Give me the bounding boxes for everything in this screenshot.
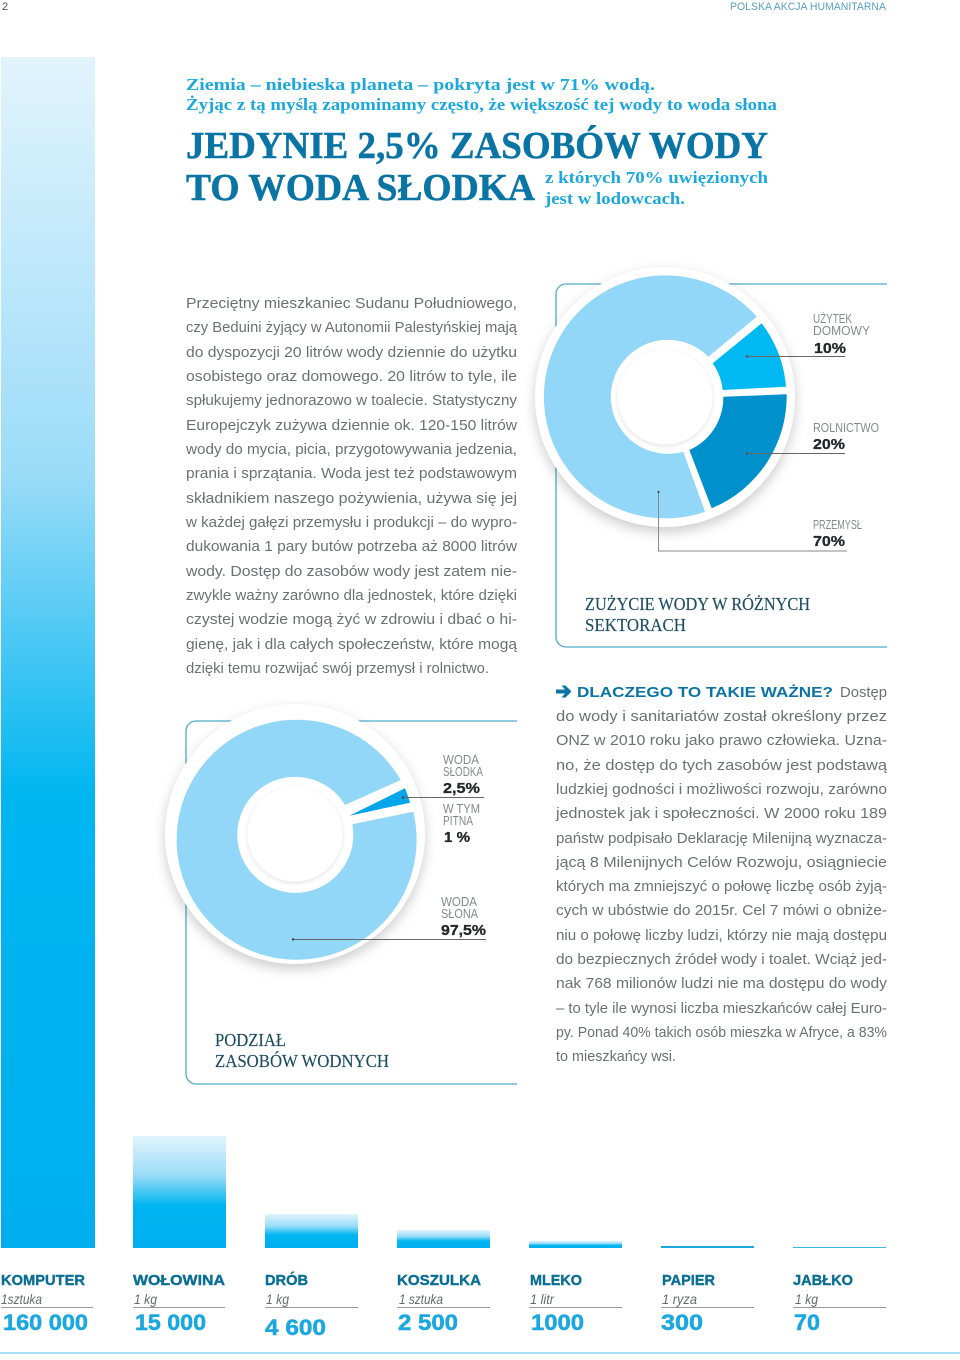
body text: right column: nak 768 milionów ludzi nie ma dostępu do wody xyxy=(556,975,888,992)
item: t-shirt xyxy=(397,1272,490,1335)
value: 20%: 20% xyxy=(813,436,845,453)
label: household use: UŻYTEK xyxy=(813,312,853,326)
value: 97,5%: 97,5% xyxy=(441,922,486,939)
body text: right column: cych w ubóstwie do 2015r. Cel 7 mówi o obniże- xyxy=(556,902,887,919)
item: milk: 1000 xyxy=(531,1310,584,1335)
panel title xyxy=(585,593,810,635)
body text: left column: wody. Dostęp do zasobów wody jest zatem nie- xyxy=(185,563,517,580)
item: beef xyxy=(133,1272,225,1335)
item: poultry: 4 600 xyxy=(265,1315,326,1340)
value: 70%: 70% xyxy=(813,533,845,550)
body text: right column xyxy=(555,684,888,1065)
body text: right column: państw podpisało Deklarację Milenijną wyznacza- xyxy=(556,830,887,847)
item: poultry: 1 kg xyxy=(266,1291,289,1307)
label: salt water: WODA xyxy=(441,895,478,909)
bar: beef xyxy=(133,1136,226,1248)
item: paper xyxy=(661,1272,754,1335)
body text: left column: gienę, jak i dla całych społeczeństw, które mogą xyxy=(186,636,518,653)
body text: left column: w każdej gałęzi przemysłu i produkcji – do wypro- xyxy=(185,514,517,531)
panel: water use by sector xyxy=(535,267,887,647)
panel title: SEKTORACH xyxy=(585,615,686,635)
bar: paper xyxy=(661,1246,754,1248)
large gradient side bar xyxy=(1,57,95,1248)
item: paper: 300 xyxy=(661,1310,703,1335)
body text: left column xyxy=(185,295,518,677)
intro heading xyxy=(186,75,778,114)
label: agriculture: ROLNICTWO xyxy=(813,421,879,435)
item: milk: MLEKO xyxy=(530,1272,582,1289)
title side note: z których 70% uwięzionych xyxy=(545,168,769,187)
body text: right column: py. Ponad 40% takich osób mieszka w Afryce, a 83% xyxy=(556,1024,887,1041)
body text: left column: składnikiem naszego pożywienia, używa się jej xyxy=(186,490,517,507)
body text: right column: których ma zmniejszyć o połowę liczbę osób żyją- xyxy=(556,878,887,895)
body text: left column: czystej wodzie mogą żyć w zdrowiu i dbać o hi- xyxy=(186,611,517,628)
panel frame xyxy=(556,284,887,647)
body text: left column: prania i sprzątania. Woda jest też podstawowym xyxy=(186,465,517,482)
item: t-shirt: 1 sztuka xyxy=(399,1291,443,1307)
body text: right column: do bezpiecznych źródeł wody i toalet. Wciąż jed- xyxy=(556,951,887,968)
item: poultry: DRÓB xyxy=(265,1271,308,1289)
panel title: ZUŻYCIE WODY W RÓŻNYCH xyxy=(585,593,810,614)
body text: right column: Dostęp xyxy=(840,684,887,701)
bar: milk xyxy=(529,1241,622,1248)
value: 2,5%: 2,5% xyxy=(443,780,480,797)
body text: left column: zwykle ważny zarówno dla jednostek, które dzięki xyxy=(186,587,517,604)
item: t-shirt: 2 500 xyxy=(398,1310,458,1335)
bar: poultry xyxy=(265,1214,358,1248)
body text: left column: dzięki temu rozwijać swój przemysł i rolnictwo. xyxy=(186,660,489,677)
icon: arrow xyxy=(556,686,572,698)
item: computer: 1sztuka xyxy=(1,1291,42,1307)
body text: right column: niu o połowę liczby ludzi, którzy nie mają dostępu xyxy=(556,927,887,944)
running header: POLSKA AKCJA HUMANITARNA xyxy=(730,1,887,13)
main title: JEDYNIE 2,5% ZASOBÓW WODY xyxy=(186,125,768,167)
body text: left column: do dyspozycji 20 litrów wody dziennie do użytku xyxy=(186,344,517,361)
panel: division of water resources xyxy=(165,704,517,1084)
leader lines xyxy=(657,355,847,551)
value: 1 %: 1 % xyxy=(444,829,470,846)
body text: left column: czy Beduini żyjący w Autonomii Palestyńskiej mają xyxy=(186,319,518,336)
body text: left column: spłukujemy jednorazowo w toalecie. Statystyczny xyxy=(186,392,517,409)
label: fresh water: WODA xyxy=(443,753,480,767)
body text: left column: Przeciętny mieszkaniec Sudanu Południowego, xyxy=(186,295,517,312)
item: beef: WOŁOWINA xyxy=(133,1272,225,1289)
item: computer: 160 000 xyxy=(3,1310,88,1335)
title side note xyxy=(544,168,769,208)
title side note: jest w lodowcach. xyxy=(544,189,685,208)
panel title xyxy=(215,1030,389,1071)
panel title: PODZIAŁ xyxy=(215,1030,286,1050)
label: drinking water: W TYM xyxy=(443,802,480,816)
main title xyxy=(186,125,768,209)
body text: right column: jącą 8 Milenijnych Celów Rozwoju, osiągniecie xyxy=(555,854,887,871)
item: apple: 70 xyxy=(794,1310,820,1335)
item: paper: 1 ryza xyxy=(662,1291,697,1307)
intro heading: Ziemia – niebieska planeta – pokryta jest w 71% wodą. xyxy=(186,75,655,94)
label: drinking water: PITNA xyxy=(443,814,474,828)
bar chart: water footprint xyxy=(133,1136,886,1248)
item: paper: PAPIER xyxy=(662,1272,715,1289)
label: fresh water: SŁODKA xyxy=(443,765,484,779)
item: apple xyxy=(793,1272,886,1335)
label: salt water xyxy=(441,895,479,921)
item: computer xyxy=(1,1272,93,1335)
label: fresh water xyxy=(443,753,484,779)
main title: TO WODA SŁODKA xyxy=(186,167,536,209)
leader lines xyxy=(292,796,486,941)
label: household use: DOMOWY xyxy=(813,324,871,338)
label: drinking water xyxy=(443,802,480,828)
label: salt water: SŁONA xyxy=(441,907,479,921)
item: apple: 1 kg xyxy=(795,1291,818,1307)
body text: right column: ONZ w 2010 roku jako prawo człowieka. Uzna- xyxy=(556,732,887,749)
body text: right column: to mieszkańcy wsi. xyxy=(556,1048,676,1065)
body text: left column: dukowania 1 pary butów potrzeba aż 8000 litrów xyxy=(186,538,517,555)
body text: left column: Europejczyk zużywa dziennie ok. 120-150 litrów xyxy=(186,417,517,434)
body text: left column: wody do mycia, picia, przygotowywania jedzenia, xyxy=(185,441,517,458)
body text: right column: – to tyle ile wynosi liczba mieszkańców całej Euro- xyxy=(556,1000,887,1017)
item: poultry xyxy=(265,1271,358,1340)
body text: right column: jednostek jak i społeczności. W 2000 roku 189 xyxy=(555,805,887,822)
label: household use xyxy=(813,312,871,338)
subheading: why it matters: DLACZEGO TO TAKIE WAŻNE? xyxy=(577,684,833,701)
item: t-shirt: KOSZULKA xyxy=(397,1272,481,1289)
label: industry: PRZEMYSŁ xyxy=(813,518,862,532)
donut chart: sectors xyxy=(535,267,795,532)
bar: apple xyxy=(793,1247,886,1248)
value: 10%: 10% xyxy=(814,340,846,357)
donut chart: water resources xyxy=(165,704,425,969)
body text: right column: no, że dostęp do tych zasobów jest podstawą xyxy=(556,757,888,774)
body text: left column: osobistego oraz domowego. 20 litrów to tyle, ile xyxy=(186,368,517,385)
item: beef: 1 kg xyxy=(134,1291,157,1307)
item: computer: KOMPUTER xyxy=(1,1272,85,1289)
page number: 2 xyxy=(2,1,8,13)
item: beef: 15 000 xyxy=(135,1310,206,1335)
item: apple: JABŁKO xyxy=(793,1272,853,1289)
intro heading: Żyjąc z tą myślą zapominamy często, że większość tej wody to woda słona xyxy=(186,95,778,114)
panel frame xyxy=(186,721,517,1084)
bar: t-shirt xyxy=(397,1230,490,1248)
item: milk xyxy=(529,1272,622,1335)
item: milk: 1 litr xyxy=(530,1291,555,1307)
body text: right column: do wody i sanitariatów został określony przez xyxy=(556,708,887,725)
panel title: ZASOBÓW WODNYCH xyxy=(215,1050,389,1071)
body text: right column: ludzkiej godności i możliwości rozwoju, zarówno xyxy=(556,781,887,798)
